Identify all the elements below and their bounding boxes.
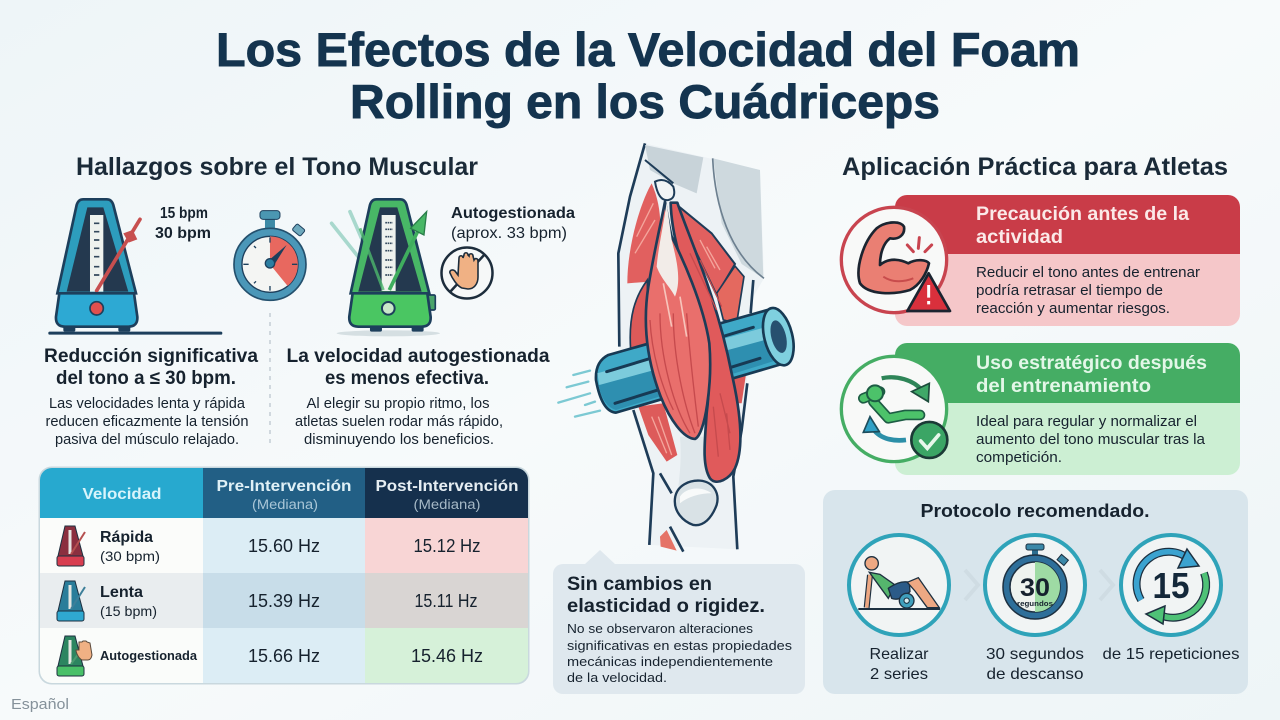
row: slow: Lenta [100,584,143,601]
step: 30 second rest: 30 [1020,574,1050,602]
panel: strategic use after training: Ideal para regular y normalizar el [976,414,1197,430]
panel: caution before activity [841,195,1240,326]
step: 30 second rest: 30 segundos [986,646,1084,663]
text: significant reduction: pasiva del músculo relajado. [55,432,239,448]
label: self-selected speed: Autogestionada [451,205,575,222]
title: Los Efectos de la Velocidad del Foam [216,23,1080,76]
table header: (Mediana) [414,497,480,512]
table header: (Mediana) [252,497,318,512]
callout: no change in elasticity: Sin cambios en [567,574,712,595]
callout: no change in elasticity: mecánicas independientemente [567,654,773,669]
panel: strategic use after training: del entrenamiento [976,376,1151,397]
text: significant reduction: reducen eficazmente la tensión [46,414,248,430]
side muscles [627,183,747,551]
title: Rolling en los Cuádriceps [350,75,940,128]
table: speed results [38,466,530,684]
text: self-selected is less effective: La velocidad autogestionada [286,346,550,367]
text: self-selected is less effective [286,346,550,448]
panel: strategic use after training: Uso estratégico después [976,353,1207,374]
table header: Pre-Intervención [216,478,352,495]
icon: hand in prohibition circle [442,248,492,298]
heading: practical application: Aplicación Práctica para Atletas [842,153,1228,181]
language tag: Español [11,696,69,713]
panel: recommended protocol: Protocolo recomendado. [920,501,1150,521]
row: fast: 15.60 Hz [248,536,320,556]
icon: green metronome [332,199,440,336]
step: 15 repetitions: de 15 repeticiones [1102,646,1240,663]
step: 30 second rest [985,535,1085,683]
label: self-selected speed [451,205,575,242]
icon: blue metronome [48,199,222,335]
step: 15 repetitions: 15 [1152,565,1190,606]
step: two sets: 2 series [870,666,928,683]
text: self-selected is less effective: es menos efectiva. [325,368,489,389]
label: self-selected speed: (aprox. 33 bpm) [451,225,567,242]
row: fast: 15.12 Hz [414,536,480,556]
callout: no change in elasticity: significativas en estas propiedades [567,638,793,653]
row: fast [57,526,480,566]
text: significant reduction [44,346,258,448]
row: fast: (30 bpm) [100,548,160,564]
label: 15 and 30 bpm: 30 bpm [155,225,211,242]
panel: caution before activity: reacción y aumentar riesgos. [976,301,1170,317]
text: significant reduction: Las velocidades lenta y rápida [49,396,246,412]
panel: strategic use after training: competición. [976,450,1062,466]
table header: Post-Intervención [376,478,518,495]
table header [82,478,518,512]
icon: flexed arm with warning [841,207,950,313]
row: slow [57,581,478,621]
kneecap [675,481,717,525]
panel: caution before activity: Precaución antes de la [976,204,1189,225]
row: self-selected: 15.66 Hz [248,646,320,666]
row: self-selected [57,636,483,676]
icon: recovery figure with check [841,356,947,462]
step: 30 second rest: regundos [1017,599,1053,608]
panel: recommended protocol [823,490,1248,694]
label: 15 and 30 bpm: 15 bpm [160,205,208,222]
panel: caution before activity: podría retrasar el tiempo de [976,283,1163,299]
heading: muscle tone findings: Hallazgos sobre el Tono Muscular [76,153,478,181]
callout: no change in elasticity: de la velocidad. [567,670,667,685]
step: 15 repetitions [1102,535,1240,663]
row: slow: (15 bpm) [100,603,157,619]
row: fast: Rápida [100,529,153,546]
illustration: quadriceps with foam roller [558,143,799,552]
step: two sets [849,535,949,683]
callout: no change in elasticity: No se observaron alteraciones [567,621,754,636]
step: two sets: Realizar [870,646,929,663]
icon: stopwatch [234,211,306,300]
text: significant reduction: Reducción significativa [44,346,258,367]
text: self-selected is less effective: atletas suelen rodar más rápido, [295,414,503,430]
central muscles [646,202,740,482]
text: self-selected is less effective: Al elegir su propio ritmo, los [306,396,490,412]
row: self-selected: Autogestionada [100,649,198,663]
panel: caution before activity: actividad [976,227,1063,248]
row: self-selected: 15.46 Hz [411,646,483,666]
text: significant reduction: del tono a ≤ 30 bpm. [56,368,236,389]
label: 15 and 30 bpm [155,205,211,242]
hip bone [655,180,674,200]
row: slow: 15.11 Hz [414,591,478,611]
callout: no change in elasticity [553,550,805,694]
panel: strategic use after training: aumento del tono muscular tras la [976,432,1206,448]
row: slow: 15.39 Hz [248,591,320,611]
table header: Velocidad [82,486,162,503]
panel: strategic use after training [841,343,1240,475]
title [216,23,1080,128]
text: self-selected is less effective: disminuyendo los beneficios. [304,432,494,448]
leg outline [618,143,764,549]
foam roller [558,305,799,417]
step: 30 second rest: de descanso [986,666,1084,683]
callout: no change in elasticity: elasticidad o rigidez. [567,596,765,617]
panel: caution before activity: Reducir el tono antes de entrenar [976,265,1200,281]
